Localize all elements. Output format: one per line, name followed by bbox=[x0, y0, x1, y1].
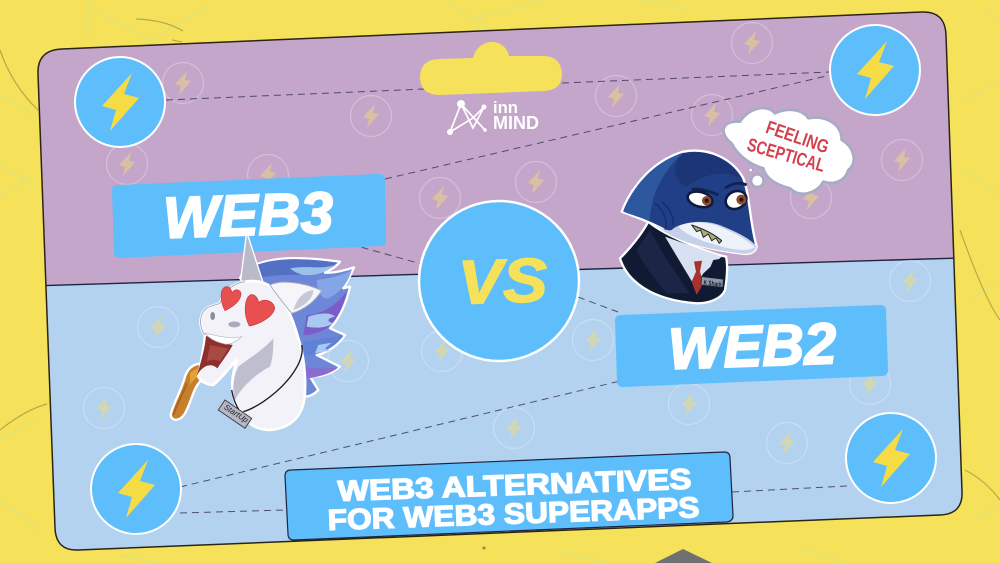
thought bubble: feeling sceptical: FEELING bbox=[763, 116, 832, 157]
illustration: shark mascot: K Shark bbox=[703, 280, 722, 289]
ear bbox=[270, 282, 322, 313]
necklace bbox=[232, 345, 302, 412]
tongue bbox=[171, 364, 215, 420]
thought bubble: feeling sceptical bbox=[724, 108, 854, 194]
icon: lightning badge top right bbox=[830, 25, 920, 115]
footer label: web3 alternatives: WEB3 ALTERNATIVES bbox=[337, 464, 692, 508]
horn bbox=[241, 232, 263, 286]
footer label: web3 alternatives: FOR WEB3 SUPERAPPS bbox=[327, 492, 700, 537]
logo: innMIND bbox=[447, 98, 539, 135]
tie bbox=[692, 261, 703, 295]
head bbox=[198, 281, 305, 430]
belly bbox=[647, 220, 757, 254]
thought bubble: feeling sceptical: SCEPTICAL bbox=[745, 134, 828, 176]
dashed connector lines bbox=[166, 72, 848, 513]
label: WEB2: WEB2 bbox=[667, 311, 837, 382]
illustration: unicorn mascot bbox=[171, 232, 354, 430]
eyes bbox=[686, 189, 714, 210]
logo: innMIND: inn bbox=[493, 98, 518, 117]
footer label: web3 alternatives bbox=[285, 452, 733, 540]
label: WEB2 bbox=[615, 305, 888, 387]
brows bbox=[692, 183, 747, 195]
badge bbox=[701, 277, 723, 287]
icon: lightning badge bottom right bbox=[846, 413, 936, 503]
suit bbox=[620, 222, 727, 303]
teeth bbox=[692, 225, 722, 243]
mane bbox=[240, 258, 354, 397]
eye hearts bbox=[221, 287, 241, 311]
VS badge: VS bbox=[457, 246, 548, 318]
VS badge bbox=[419, 201, 579, 361]
gill bbox=[655, 202, 673, 230]
label: WEB3: WEB3 bbox=[162, 180, 334, 251]
shirt bbox=[665, 237, 722, 287]
icon: lightning badge bottom left bbox=[91, 444, 181, 534]
neck shadow bbox=[233, 338, 273, 400]
nostrils bbox=[210, 312, 215, 320]
head bbox=[622, 151, 757, 254]
logo: innMIND: MIND bbox=[493, 113, 539, 133]
panel: purple upper half bbox=[30, 0, 960, 286]
illustration: shark mascot bbox=[620, 151, 757, 303]
faint bolt badges pattern bbox=[84, 22, 930, 464]
mouth bbox=[197, 336, 233, 376]
lapel bbox=[637, 230, 690, 293]
icon: lightning badge top left bbox=[75, 57, 165, 147]
illustration: unicorn mascot: StartUp bbox=[222, 402, 250, 425]
logo plate bbox=[420, 42, 562, 95]
label: WEB3 bbox=[112, 174, 386, 258]
